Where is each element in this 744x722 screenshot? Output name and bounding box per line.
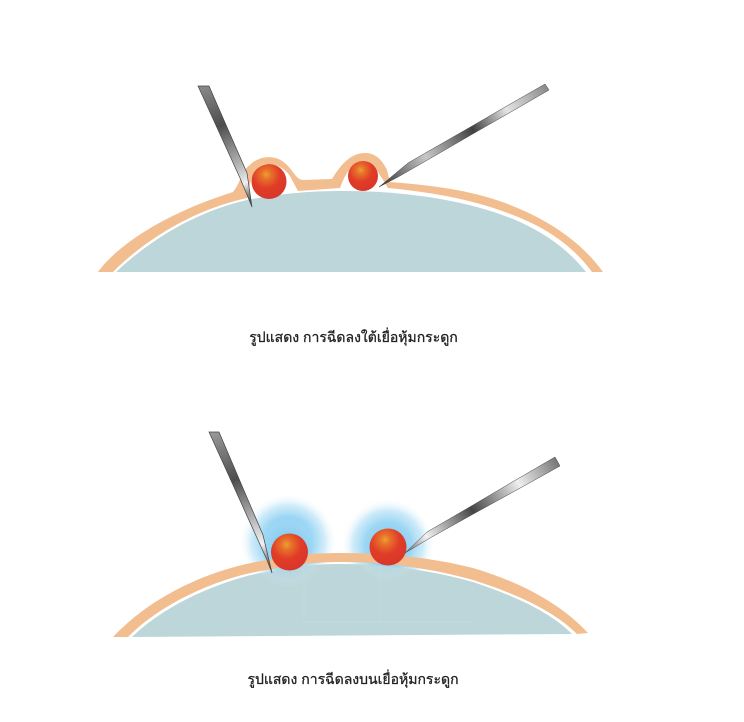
diagram: injection under the periosteum — [98, 84, 603, 272]
glow right — [341, 498, 435, 592]
faint glow on bone — [252, 514, 422, 588]
needle left — [198, 86, 252, 207]
needle right — [379, 84, 549, 187]
periosteum layer — [113, 553, 588, 637]
diagram: injection above the periosteum — [113, 432, 588, 637]
periosteum layer with two raised bumps — [98, 153, 603, 272]
bone — [132, 564, 572, 637]
drug ball right — [348, 161, 378, 191]
needle right — [405, 457, 560, 553]
caption bottom: รูปแสดง การฉีดลงบนเยื่อหุ้มกระดูก — [247, 670, 459, 688]
glow left — [239, 493, 337, 591]
drug ball left — [252, 164, 286, 199]
drug ball right — [370, 528, 406, 566]
caption top: รูปแสดง การฉีดลงใต้เยื่อหุ้มกระดูก — [249, 328, 458, 346]
drug ball left — [271, 534, 308, 570]
bone — [116, 191, 586, 272]
needle left — [209, 432, 272, 573]
